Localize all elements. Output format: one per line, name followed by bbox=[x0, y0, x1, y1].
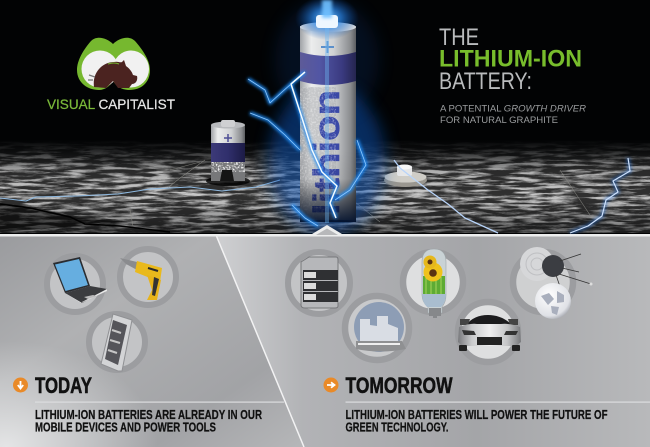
title bbox=[439, 24, 582, 95]
text: tomorrow bbox=[346, 408, 608, 434]
button cell bbox=[384, 164, 427, 187]
subtitle bbox=[440, 104, 587, 125]
text: today: LITHIUM-ION BATTERIES ARE ALREADY IN OUR bbox=[35, 408, 262, 422]
logo: Visual Capitalist bbox=[47, 38, 175, 112]
hero background bbox=[0, 0, 650, 235]
title: LITHIUM-ION bbox=[439, 46, 582, 72]
bullet: tomorrow bbox=[324, 378, 338, 392]
circle: sports car bbox=[458, 302, 521, 362]
circle: battery pack bbox=[288, 252, 350, 314]
battery brand lettering: lithion bbox=[306, 90, 347, 215]
heading: tomorrow: TOMORROW bbox=[346, 373, 453, 398]
circle: city in a snow globe bbox=[345, 296, 409, 360]
bottom panel: today bbox=[0, 235, 304, 447]
circle: sunflower light bulb bbox=[403, 249, 463, 318]
large lithium-ion battery bbox=[269, 0, 385, 235]
heading: today: TODAY bbox=[35, 373, 92, 398]
main lightning around battery bbox=[248, 72, 366, 226]
icon: binocular piggy bank bbox=[77, 38, 150, 90]
ground lightning arcs bbox=[0, 158, 630, 233]
circle: power drill bbox=[120, 249, 176, 305]
panel divider bbox=[216, 235, 304, 447]
title: BATTERY: bbox=[439, 68, 532, 95]
ground texture bbox=[0, 140, 650, 233]
small battery bbox=[206, 120, 250, 186]
bottom panel: tomorrow bbox=[216, 235, 650, 447]
text: tomorrow: GREEN TECHNOLOGY. bbox=[346, 420, 448, 434]
hero edge and pointer bbox=[0, 225, 650, 236]
text: today: MOBILE DEVICES AND POWER TOOLS bbox=[35, 420, 216, 434]
logo wordmark: VISUAL CAPITALIST bbox=[47, 96, 175, 112]
plus sign bbox=[321, 41, 334, 53]
bullet: today bbox=[13, 378, 28, 392]
title: THE bbox=[439, 24, 479, 51]
text: today bbox=[35, 408, 262, 434]
circle: laptop bbox=[47, 256, 107, 312]
rule: tomorrow bbox=[346, 402, 650, 403]
subtitle: A POTENTIAL GROWTH DRIVER bbox=[440, 104, 587, 114]
rule: today bbox=[35, 402, 284, 403]
circle: satellite and globe bbox=[513, 247, 592, 319]
circle: smartphone bbox=[89, 314, 145, 371]
top light beam bbox=[295, 0, 359, 40]
subtitle: FOR NATURAL GRAPHITE bbox=[440, 115, 558, 125]
